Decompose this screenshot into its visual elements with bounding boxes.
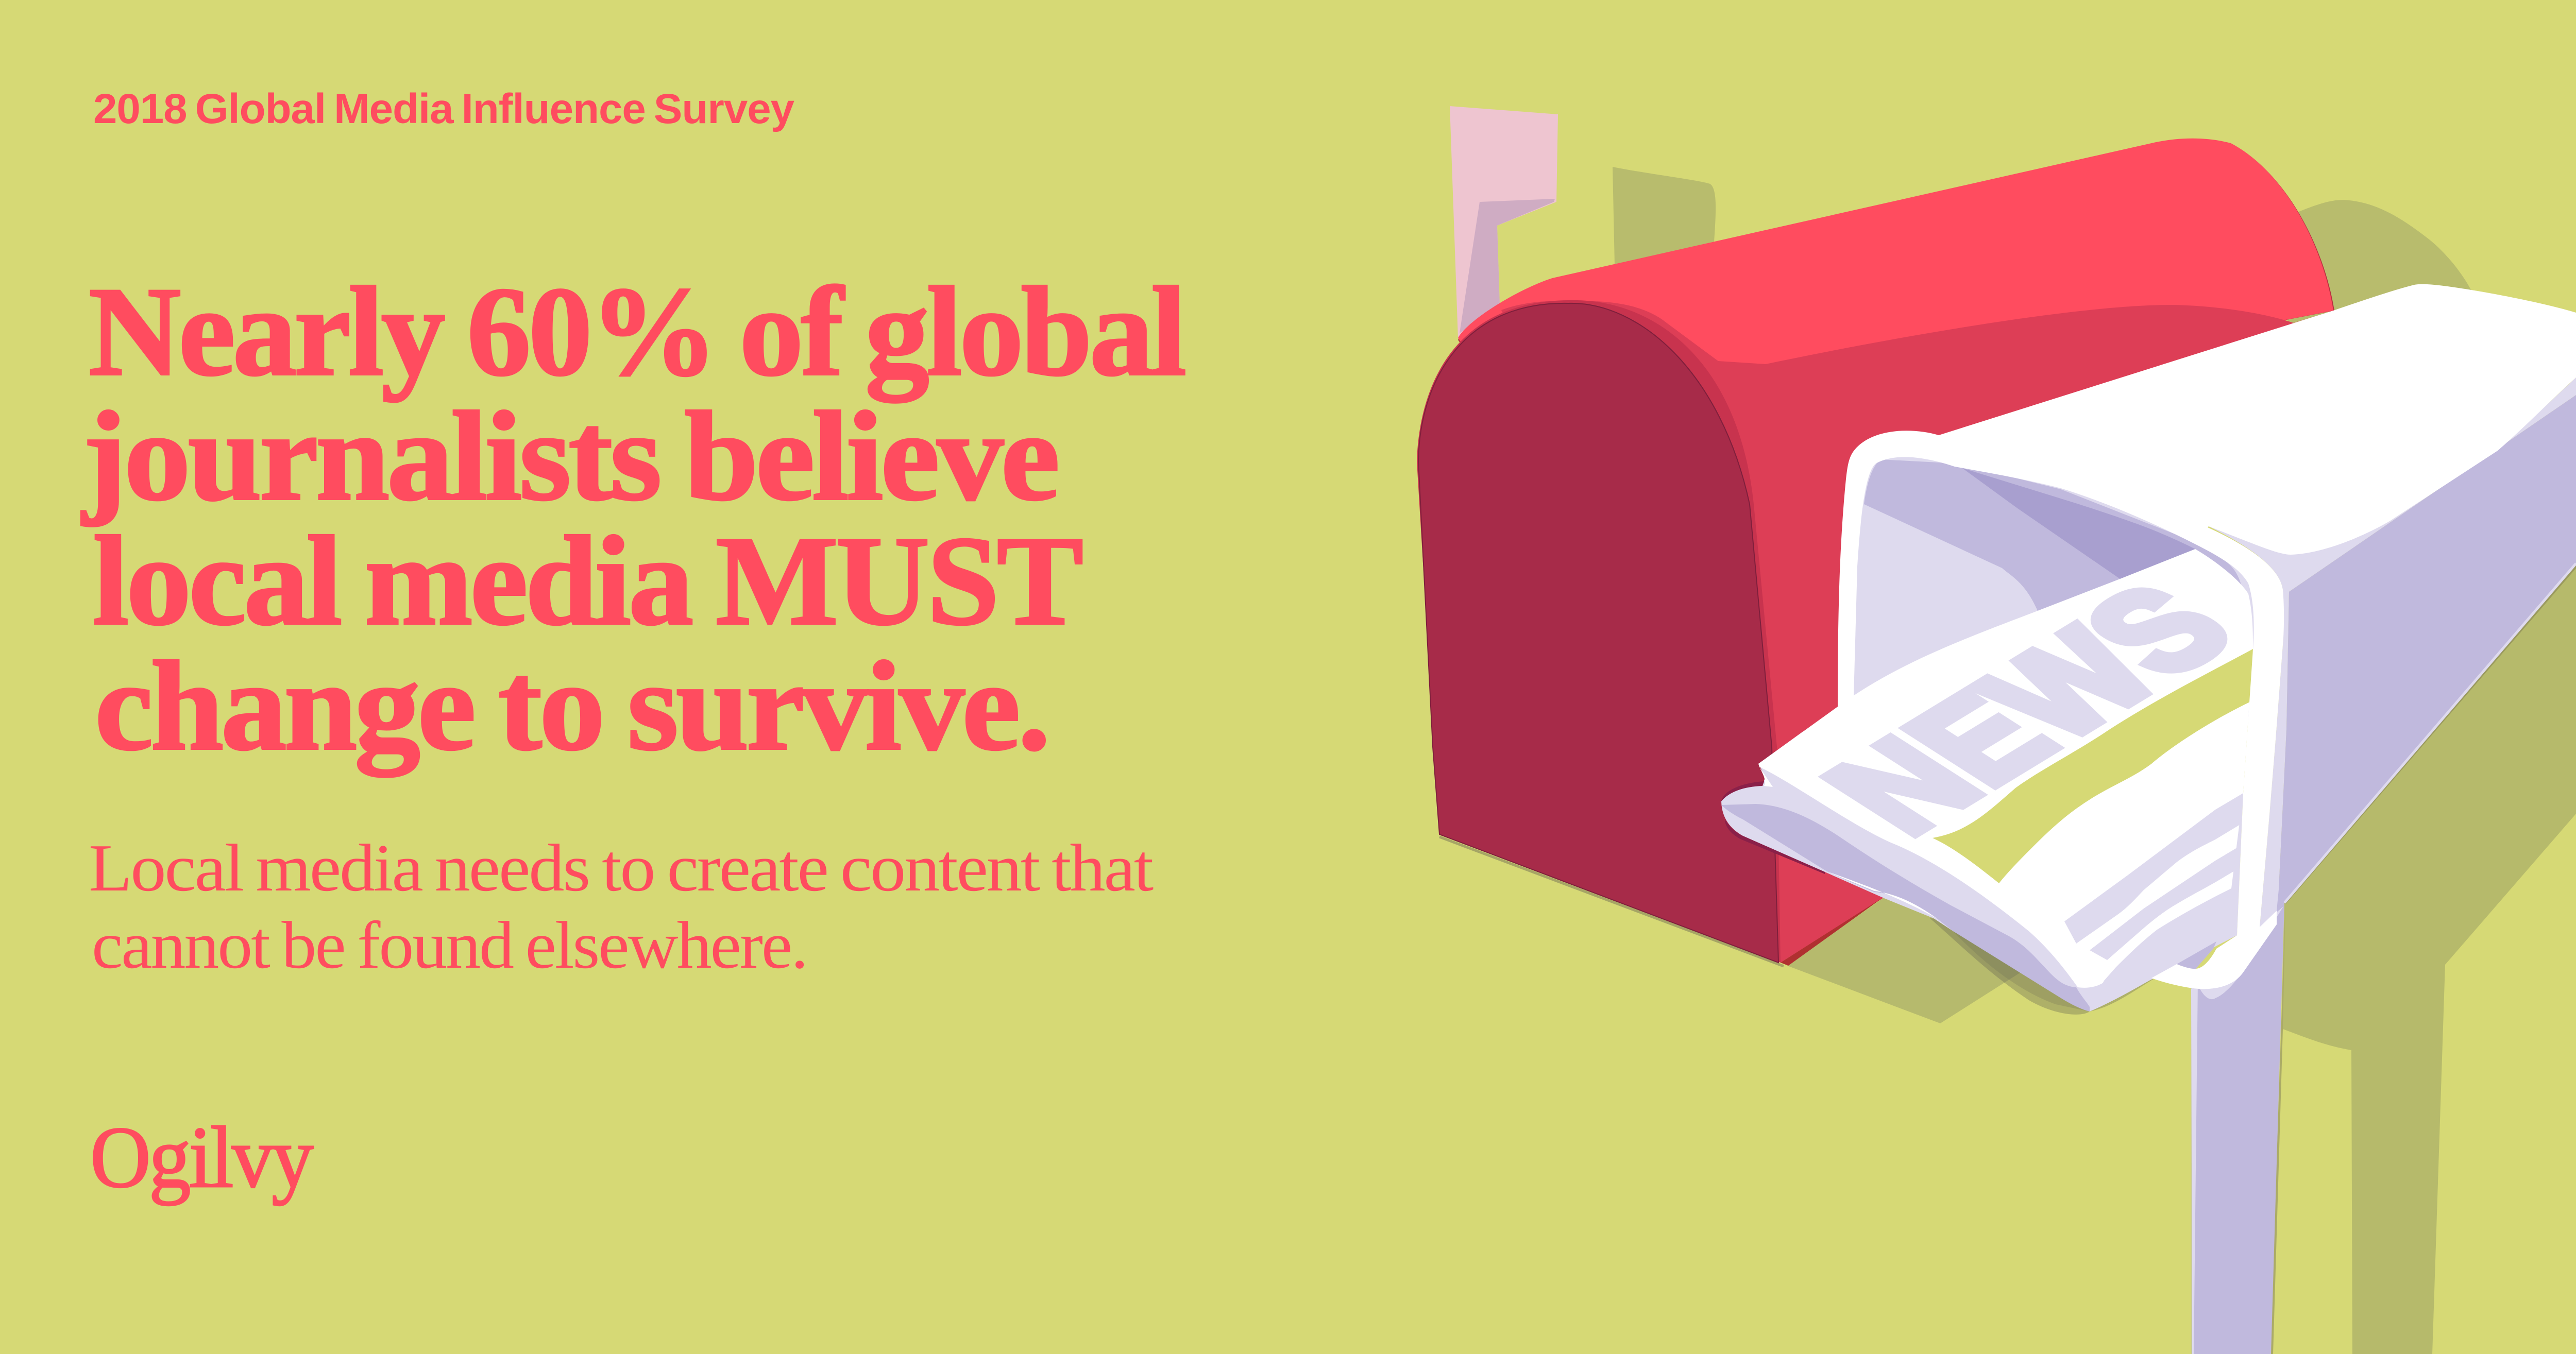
newspaper underside: [1721, 731, 2243, 1012]
headline: journalists believe: [81, 385, 1057, 527]
headline: Nearly 60% of global: [89, 261, 1184, 403]
newspaper masthead: NEWS: [1791, 562, 2267, 856]
headline: change to survive.: [95, 635, 1048, 777]
flag: [1450, 106, 1558, 338]
newspaper lavender fold: [1721, 804, 2090, 1012]
cast shadows: [1439, 167, 2576, 1354]
mailbox side panel: [2197, 378, 2576, 999]
gap between newspaper pages: [1933, 649, 2253, 883]
illustration: mailbox with newspaper: [1417, 106, 2576, 1354]
mailbox white lid and frame: [1838, 284, 2576, 989]
logo: Ogilvy: Ogilvy: [90, 1109, 314, 1206]
subheading: Local media needs to create content that: [89, 831, 1154, 905]
headline: [81, 261, 1184, 777]
subheading: cannot be found elsewhere.: [92, 908, 807, 983]
newspaper: [1721, 549, 2267, 1012]
newspaper front page: [1758, 549, 2253, 988]
headline: local media MUST: [93, 510, 1082, 652]
mailbox door: [1418, 303, 1778, 963]
newspaper text lines: [2064, 793, 2243, 1004]
subheading: [89, 831, 1154, 983]
mailbox opening interior: [1850, 448, 2259, 721]
newspaper tail shading: [1721, 781, 1825, 874]
mailbox post: [2191, 903, 2284, 1354]
survey label: 2018 Global Media Influence Survey: [93, 85, 794, 132]
mailbox red body: [1417, 139, 2334, 966]
